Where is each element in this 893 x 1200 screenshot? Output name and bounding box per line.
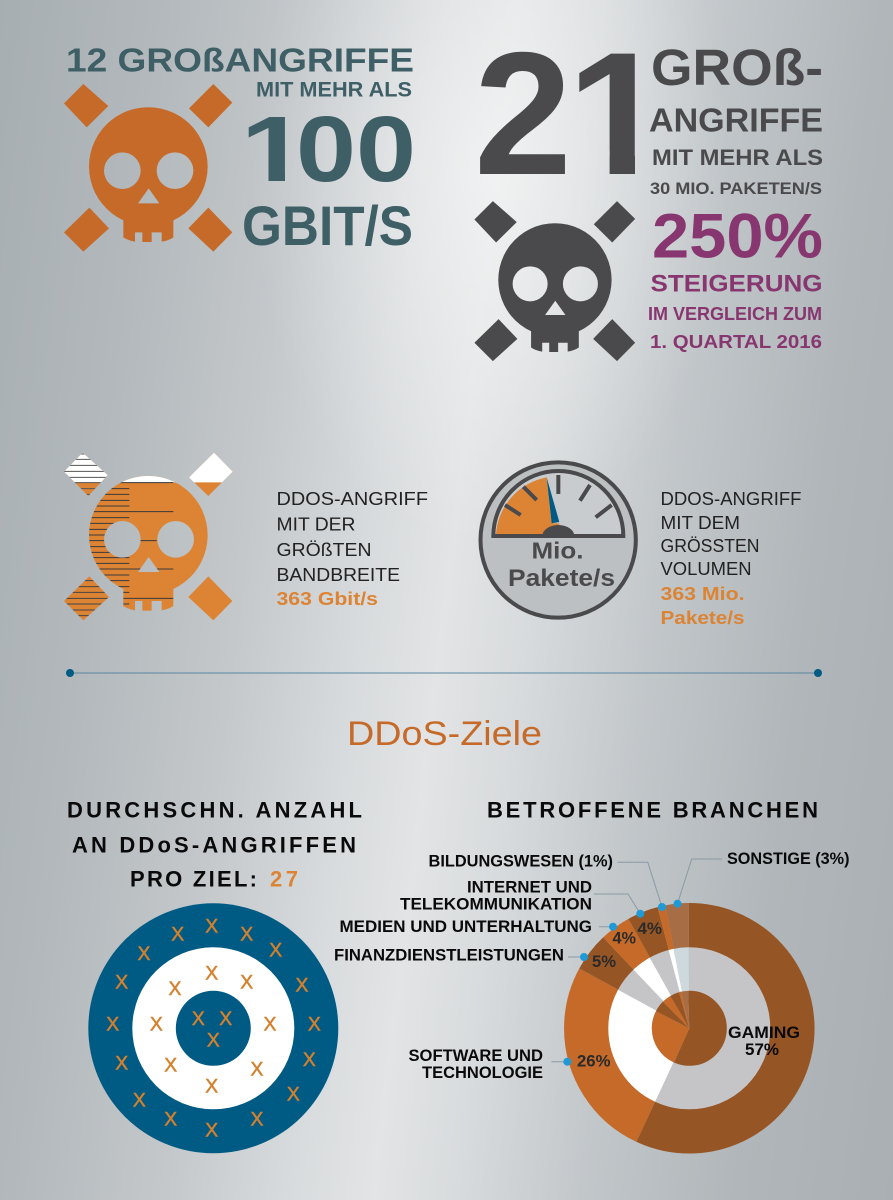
- donut labels: [334, 850, 850, 1082]
- section heading: DDoS-Ziele: DDoS-Ziele: [347, 715, 542, 753]
- headline: 12 Großangriffe: 12 GROßANGRIFFE: [66, 42, 414, 80]
- text: largest bandwidth attack: MIT DER: [276, 514, 356, 534]
- text: largest bandwidth attack: GRÖßTEN: [276, 539, 372, 560]
- chart: target rings with 27 X marks: X: [308, 1015, 321, 1036]
- donut percentages: 5%: [592, 952, 616, 971]
- donut labels: MEDIEN UND UNTERHALTUNG: [340, 918, 592, 936]
- text: largest volume attack: Pakete/s: [660, 608, 744, 628]
- chart: target rings with 27 X marks: X: [240, 972, 253, 993]
- chart: target rings with 27 X marks: X: [219, 1009, 232, 1030]
- donut percentages: 4%: [612, 928, 636, 948]
- chart: target rings with 27 X marks: X: [106, 1015, 119, 1036]
- chart: target rings with 27 X marks: X: [269, 941, 282, 962]
- chart: target rings with 27 X marks: X: [115, 1053, 128, 1074]
- chart: target rings with 27 X marks: X: [205, 963, 218, 984]
- big number 21: [480, 52, 635, 174]
- heading: average attacks per target: 27: [270, 866, 298, 892]
- chart: target rings with 27 X marks: X: [264, 1015, 277, 1036]
- icon: dark skull: [474, 201, 635, 361]
- text: largest volume attack: MIT DEM: [660, 513, 740, 533]
- donut percentages: GAMING: [728, 1023, 800, 1042]
- text: largest bandwidth attack: [276, 488, 428, 609]
- callout: 250% increase: STEIGERUNG: [650, 270, 822, 298]
- donut labels: BILDUNGSWESEN (1%): [428, 852, 613, 870]
- chart: target rings with 27 X marks: X: [169, 979, 182, 1000]
- chart: target rings with 27 X marks: X: [251, 1110, 264, 1131]
- text: largest bandwidth attack: BANDBREITE: [276, 564, 400, 585]
- callout: 250% increase: [648, 202, 823, 352]
- leader lines and dots: [551, 859, 722, 1066]
- text: largest volume attack: GRÖSSTEN: [660, 536, 760, 556]
- donut labels: SONSTIGE (3%): [727, 850, 850, 868]
- chart: target rings with 27 X marks: [88, 903, 338, 1153]
- chart: target rings with 27 X marks: X: [164, 1110, 177, 1131]
- headline: 12 Großangriffe: MIT MEHR ALS: [256, 78, 412, 102]
- donut labels: TECHNOLOGIE: [422, 1064, 543, 1082]
- chart: industries donut: [586, 925, 792, 1131]
- chart: target rings with 27 X marks: X: [207, 1031, 220, 1052]
- callout: 250% increase: 250%: [652, 202, 823, 272]
- text: largest volume attack: VOLUMEN: [660, 559, 752, 579]
- headline: Großangriffe: 30 MIO. PAKETEN/S: [650, 179, 822, 198]
- chart: target rings with 27 X marks: X: [171, 925, 184, 946]
- chart: target rings with 27 X marks: X: [240, 925, 253, 946]
- text: largest volume attack: 363 Mio.: [660, 584, 744, 604]
- heading: average attacks per target: DURCHSCHN. ANZAHL: [67, 798, 362, 822]
- headline: Großangriffe: GROß-: [651, 39, 823, 96]
- chart: target rings with 27 X marks: X: [287, 1085, 300, 1106]
- heading: average attacks per target: PRO ZIEL:: [130, 866, 257, 892]
- callout: 250% increase: 1. QUARTAL 2016: [650, 331, 822, 352]
- heading: average attacks per target: [67, 798, 362, 892]
- heading: affected industries: BETROFFENE BRANCHEN: [487, 798, 818, 822]
- icon: striped bandwidth skull: [60, 453, 233, 620]
- icon: orange skull: [64, 84, 232, 252]
- chart: target rings with 27 X marks: X: [138, 944, 151, 965]
- heading: average attacks per target: AN DDoS-ANGRIFFEN: [72, 832, 356, 858]
- donut percentages: 57%: [745, 1040, 779, 1059]
- text: largest bandwidth attack: DDOS-ANGRIFF: [276, 488, 428, 509]
- headline: 12 Großangriffe: 00: [296, 97, 416, 201]
- donut labels: FINANZDIENSTLEISTUNGEN: [334, 946, 564, 964]
- headline: 12 Großangriffe: GBIT/S: [242, 194, 413, 257]
- chart: target rings with 27 X marks: X: [251, 1060, 264, 1081]
- donut percentages: 26%: [577, 1052, 610, 1070]
- text: largest volume attack: [660, 489, 802, 628]
- chart: target rings with 27 X marks: X: [150, 1015, 163, 1036]
- callout: 250% increase: IM VERGLEICH ZUM: [648, 303, 822, 324]
- donut percentages: [577, 919, 800, 1070]
- chart: target rings with 27 X marks: X: [205, 917, 218, 938]
- chart: target rings with 27 X marks: X: [115, 972, 128, 993]
- donut percentages: 4%: [638, 919, 662, 938]
- chart: target rings with 27 X marks: X: [164, 1056, 177, 1077]
- icon: gauge: Pakete/s: [508, 565, 615, 592]
- chart: target rings with 27 X marks: X: [133, 1091, 146, 1112]
- donut labels: INTERNET UND: [467, 878, 592, 896]
- headline: 12 Großangriffe: 1: [240, 97, 307, 201]
- chart: target rings with 27 X marks: X: [296, 976, 309, 997]
- chart: target rings with 27 X marks: X: [303, 1050, 316, 1071]
- headline: Großangriffe: MIT MEHR ALS: [652, 145, 823, 170]
- headline: Großangriffe: ANGRIFFE: [649, 102, 823, 138]
- icon: gauge: Mio.: [532, 538, 584, 564]
- big number 21: 1: [567, 17, 669, 212]
- text: largest bandwidth attack: 363 Gbit/s: [276, 588, 378, 609]
- chart: target rings with 27 X marks: X: [205, 1077, 218, 1098]
- big number 21: 2: [474, 17, 572, 212]
- text: largest volume attack: DDOS-ANGRIFF: [660, 489, 802, 509]
- chart: target rings with 27 X marks: X: [192, 1009, 205, 1030]
- chart: target rings with 27 X marks: X: [205, 1121, 218, 1142]
- headline: 12 Großangriffe: [66, 42, 416, 257]
- headline: Großangriffe: [649, 39, 823, 198]
- donut labels: SOFTWARE UND: [408, 1047, 543, 1065]
- donut labels: TELEKOMMUNIKATION: [400, 896, 592, 914]
- icon: gauge: [480, 462, 636, 618]
